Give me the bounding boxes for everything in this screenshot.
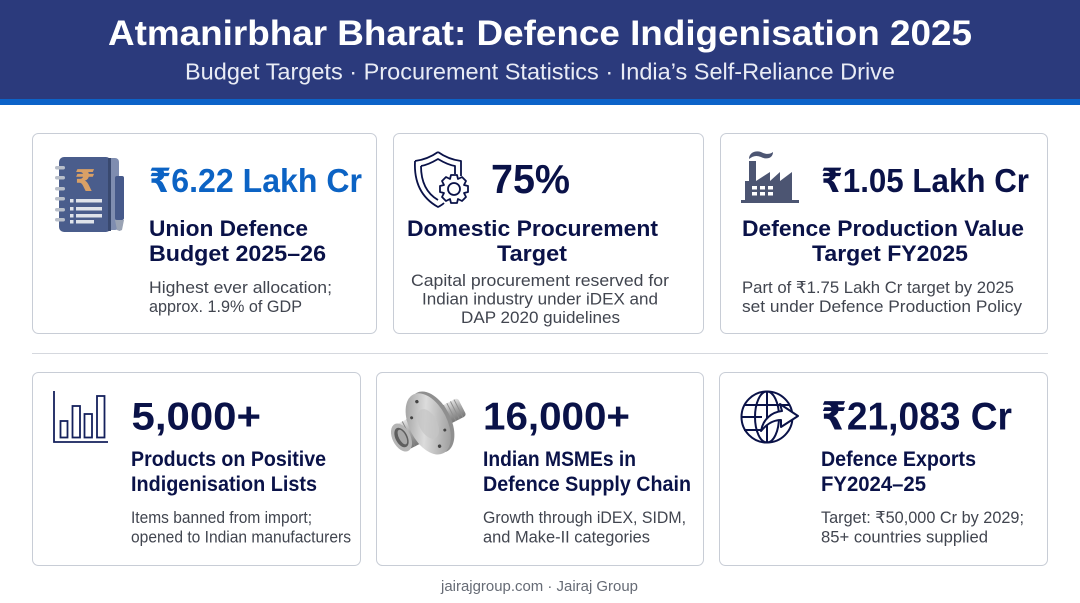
- title: Atmanirbhar Bharat: Defence Indigenisation 2025: [108, 14, 972, 53]
- panel: MSMEs in supply chain: [376, 372, 704, 566]
- icon: factory: [741, 151, 799, 203]
- card description: [149, 279, 332, 316]
- card heading: Domestic Procurement: [407, 216, 659, 241]
- card description: [821, 509, 1024, 546]
- card heading: Union Defence: [149, 216, 308, 241]
- panel: defence production value: [720, 134, 1048, 334]
- card description: Part of ₹1.75 Lakh Cr target by 2025: [742, 279, 1014, 297]
- card heading: Indigenisation Lists: [131, 473, 317, 496]
- stat value: 75%: [491, 156, 570, 202]
- card description: [483, 509, 686, 546]
- icon: shield with gear: [415, 152, 468, 207]
- icon: globe with arrow: [742, 392, 798, 442]
- card heading: [149, 216, 326, 266]
- card description: DAP 2020 guidelines: [461, 309, 620, 327]
- footer credit: jairajgroup.com · Jairaj Group: [440, 579, 638, 595]
- card description: [742, 279, 1023, 316]
- header banner: [0, 0, 1080, 105]
- card description: Items banned from import;: [131, 509, 312, 527]
- card description: Indian industry under iDEX and: [422, 290, 658, 308]
- subtitle: Budget Targets · Procurement Statistics · India’s Self-Reliance Drive: [185, 58, 895, 84]
- icon: bar chart: [54, 391, 108, 442]
- card description: set under Defence Production Policy: [742, 298, 1023, 316]
- card description: approx. 1.9% of GDP: [149, 298, 302, 316]
- card heading: Defence Exports: [821, 448, 976, 471]
- stat value: ₹1.05 Lakh Cr: [821, 163, 1029, 200]
- card description: [131, 509, 351, 546]
- card description: and Make-II categories: [483, 528, 650, 546]
- card heading: [742, 216, 1024, 266]
- card description: Highest ever allocation;: [149, 279, 332, 297]
- stat value: ₹21,083 Cr: [821, 396, 1012, 438]
- card heading: Budget 2025–26: [149, 241, 326, 266]
- stat value: ₹6.22 Lakh Cr: [149, 163, 362, 200]
- panel: union defence budget: [32, 134, 376, 334]
- card heading: Target FY2025: [812, 241, 968, 266]
- card heading: FY2024–25: [821, 473, 926, 496]
- card description: Capital procurement reserved for: [411, 272, 670, 290]
- card heading: Defence Production Value: [742, 216, 1024, 241]
- icon: rupee notebook: [55, 157, 124, 232]
- stat value: 5,000+: [132, 396, 261, 438]
- card heading: [483, 448, 691, 496]
- card description: 85+ countries supplied: [821, 528, 988, 546]
- icon glyph: rupee sign: ₹: [75, 164, 95, 199]
- card heading: [407, 216, 659, 266]
- card heading: [131, 448, 326, 496]
- card heading: Products on Positive: [131, 448, 326, 471]
- panel: domestic procurement target: [394, 134, 704, 334]
- card heading: Target: [497, 241, 568, 266]
- card heading: Defence Supply Chain: [483, 473, 691, 496]
- stat value: 16,000+: [483, 396, 630, 438]
- card description: opened to Indian manufacturers: [131, 528, 351, 546]
- card description: Target: ₹50,000 Cr by 2029;: [821, 509, 1024, 527]
- card description: [411, 272, 670, 327]
- card heading: Indian MSMEs in: [483, 448, 636, 471]
- card heading: [821, 448, 976, 496]
- card description: Growth through iDEX, SIDM,: [483, 509, 686, 527]
- icon: machined metal part: [378, 377, 477, 471]
- panel: defence exports: [720, 372, 1048, 566]
- panel: positive indigenisation lists: [32, 372, 360, 566]
